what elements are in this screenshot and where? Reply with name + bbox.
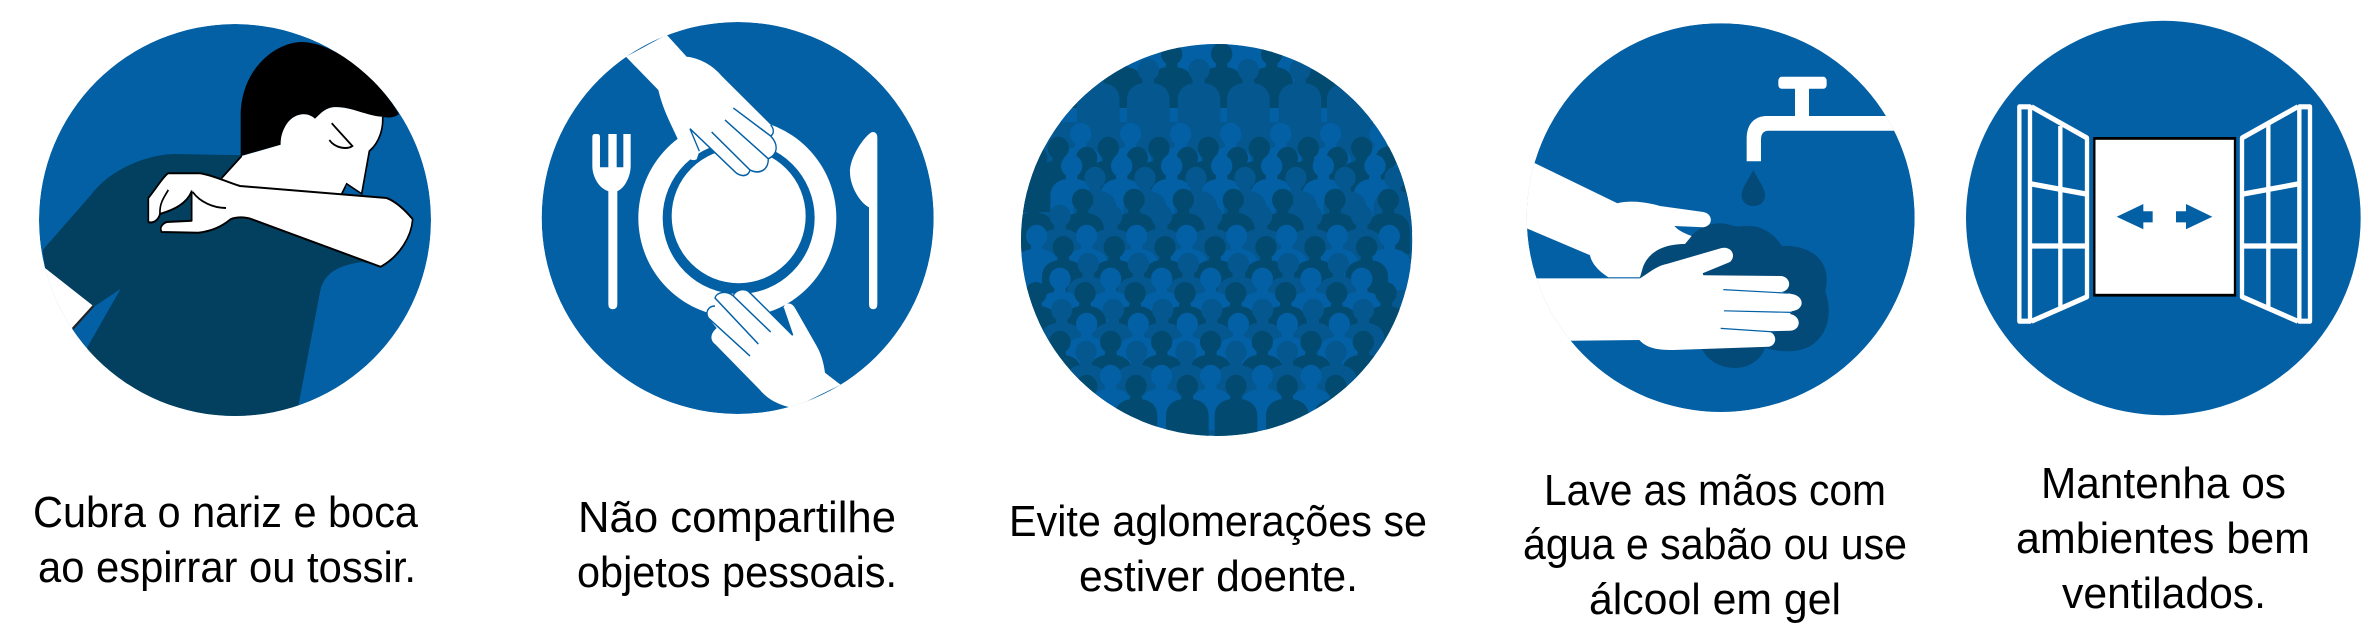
caption: ventilate: ventilados. (2062, 569, 2266, 618)
panel: cover nose and mouth (33, 24, 431, 592)
icon: plate, cutlery and two hands (542, 22, 934, 414)
panel: avoid crowds (1012, 44, 1426, 592)
icon: crowd of silhouettes (1021, 44, 1412, 436)
panel: keep rooms ventilated (1966, 21, 2361, 618)
icon: faucet, drop, foam and hands (1513, 23, 1915, 412)
caption: cover nose: Cubra o nariz e boca (33, 488, 418, 537)
caption: do not share: Não compartilhe (578, 493, 896, 542)
caption: avoid crowds: Evite aglomerações se (1009, 497, 1427, 546)
icon: open window with arrows (1966, 21, 2361, 415)
caption: ventilate: ambientes bem (2016, 514, 2310, 563)
caption: wash hands: álcool em gel (1589, 575, 1841, 624)
caption: wash hands: Lave as mãos com (1544, 466, 1886, 515)
icon: person sneezing into elbow (33, 24, 431, 424)
caption: do not share: objetos pessoais. (577, 548, 897, 597)
caption: cover nose: ao espirrar ou tossir. (38, 543, 416, 592)
caption: avoid crowds: estiver doente. (1079, 552, 1358, 601)
panel: wash hands (1513, 23, 1919, 624)
caption: ventilate: Mantenha os (2041, 459, 2286, 508)
caption: wash hands: água e sabão ou use (1523, 520, 1907, 569)
panel: do not share objects (542, 22, 934, 597)
